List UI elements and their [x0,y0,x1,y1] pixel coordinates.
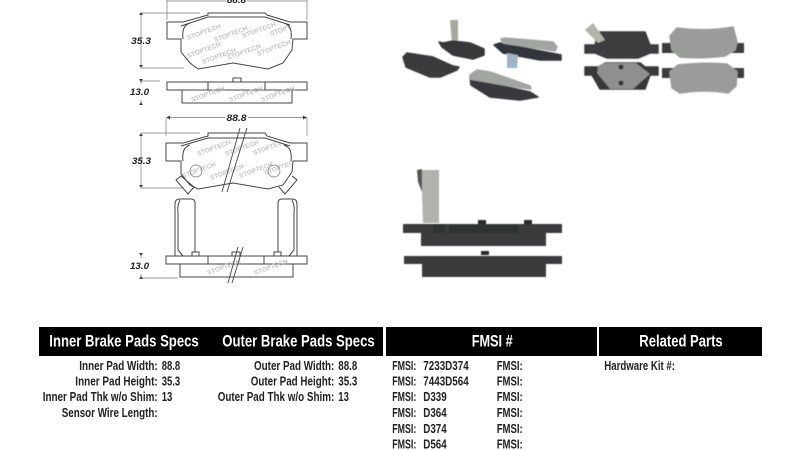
pad: front [470,70,538,100]
inner pad specs: 88.8 [162,359,180,373]
friction outline [181,17,291,39]
header: related parts [599,327,762,356]
FMSI numbers: D374 [423,422,447,436]
pad watermark: STOPTECH [226,43,262,62]
pad: bottom left [585,63,658,89]
FMSI numbers: FMSI: [497,406,523,420]
dimension: width 88.8 (top) [167,0,307,20]
header: FMSI [386,327,597,356]
FMSI numbers: FMSI: [497,422,523,436]
photo: four brake pads angled [403,20,561,100]
pad: top right friction [662,27,744,58]
pad watermark: STOPTECH [186,41,222,60]
photo: pads side view [403,169,562,277]
inner pad specs: Inner Pad Width: [79,359,158,373]
dimension: thickness 13.0 [130,79,160,105]
pad watermark: STOPTECH [186,23,222,42]
FMSI numbers: FMSI: [392,422,416,436]
FMSI numbers: 7233D374 [423,359,469,373]
inner pad specs: 13 [162,390,172,404]
pad: top left backing [585,32,658,58]
pad watermark: STOPTECH [269,19,305,38]
inner pad specs: Inner Pad Thk w/o Shim: [43,390,158,404]
pad watermark: STOPTECH [263,158,299,177]
wear clip [422,170,439,223]
photo: two pad sets flat [585,23,744,93]
blue clip [507,53,518,68]
header: inner and outer specs [39,327,383,356]
dimension: width 88.8: 88.8 [226,113,247,124]
FMSI numbers: FMSI: [497,390,523,404]
pad side view [167,78,307,104]
pad: back left [403,53,459,77]
FMSI numbers: 7443D564 [423,374,469,388]
dimension: thickness 13.0 [130,253,178,279]
pad side view: STOPTECH [190,85,226,104]
header: inner and outer specs: Inner Brake Pads Specs [49,332,199,350]
dimension: thickness 13.0: 13.0 [130,261,150,272]
dimension: height 35.3 [132,133,200,188]
dimension: height 35.3 [131,12,200,68]
pad front outline with sensors [166,133,307,189]
FMSI numbers: D364 [423,406,447,420]
pad front outline [167,13,307,69]
pad watermark: STOPTECH [252,138,288,157]
pad side view: STOPTECH [206,258,242,277]
inner pad specs: Sensor Wire Length: [62,406,158,420]
break lines [228,247,243,283]
header: FMSI: FMSI # [472,332,513,350]
upper pad side [403,220,562,246]
dimension: height 35.3: 35.3 [131,36,152,47]
wear clip [450,20,458,44]
pad: bottom right friction [662,63,744,93]
table headers [39,327,762,356]
FMSI numbers: FMSI: [392,374,416,388]
break lines [222,128,247,192]
pad: right [494,38,561,60]
outer pad specs: 88.8 [338,359,357,373]
pad watermark: STOPTECH [201,47,237,66]
inner pad specs: 35.3 [162,374,180,388]
FMSI numbers: FMSI: [392,406,416,420]
header: inner and outer specs: Outer Brake Pads Specs [222,332,375,350]
related parts text: Hardware Kit #: [604,359,675,373]
dimension: height 35.3: 35.3 [132,156,152,167]
pad watermark: STOPTECH [256,39,292,58]
outer pad specs: 13 [338,390,349,404]
pad watermark: STOPTECH [224,139,260,158]
pad side view: STOPTECH [228,85,264,104]
sensor clips [175,199,297,256]
pad watermark: STOPTECH [238,161,274,180]
FMSI numbers: FMSI: [392,390,416,404]
FMSI numbers [392,359,523,450]
diagram: lower pad technical drawing [130,113,307,283]
outer pad specs: Outer Pad Width: [254,359,334,373]
outer pad specs: 35.3 [338,374,357,388]
dimension: thickness 13.0: 13.0 [130,87,150,98]
FMSI numbers: FMSI: [497,359,523,373]
pad side view: STOPTECH [260,85,296,104]
FMSI numbers: D339 [423,390,447,404]
pad watermark [182,140,292,180]
FMSI numbers: FMSI: [392,359,416,373]
pad watermark: STOPTECH [241,21,277,40]
lower pad side [404,251,562,277]
inner pad specs [43,359,180,420]
pad side view: STOPTECH [253,258,289,277]
sensor clip [585,23,605,43]
inner pad specs: Inner Pad Height: [75,374,158,388]
pad: back middle [439,41,484,59]
outer pad specs [218,359,357,404]
dimension: width 88.8 [166,113,307,136]
header: related parts: Related Parts [639,332,723,350]
pad watermark: STOPTECH [209,163,245,182]
pad watermark: STOPTECH [196,139,232,158]
FMSI numbers: FMSI: [497,374,523,388]
outer pad specs: Outer Pad Thk w/o Shim: [218,390,334,404]
outer pad specs: Outer Pad Height: [251,374,334,388]
pad side view [166,252,307,277]
diagram: top pad technical drawing [130,0,307,105]
pad watermark: STOPTECH [181,161,217,180]
pad watermark: STOPTECH [213,25,249,44]
pad watermark [187,22,292,64]
